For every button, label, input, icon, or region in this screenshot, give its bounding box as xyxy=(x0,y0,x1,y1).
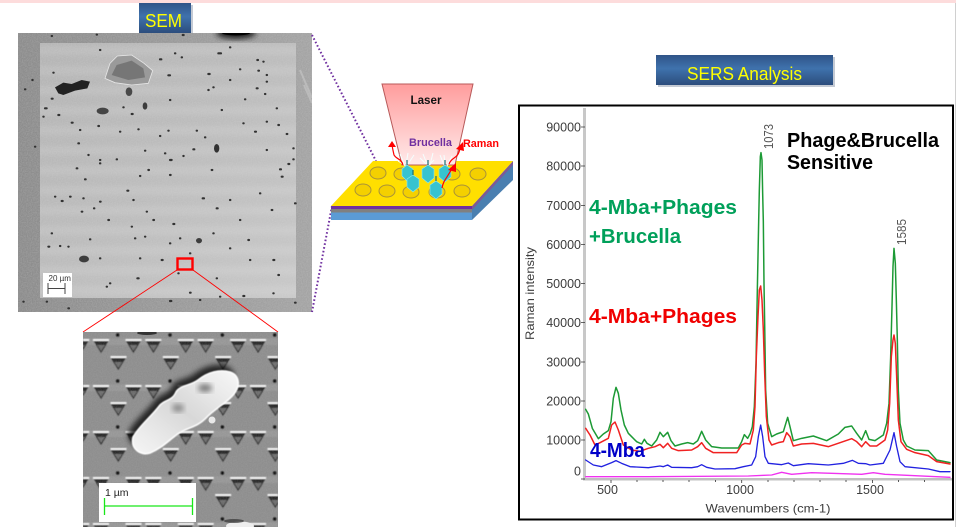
top pink strip xyxy=(0,0,956,3)
x axis tick labels: 1000 xyxy=(726,483,754,497)
SEM scale bar 20 µm xyxy=(43,273,72,297)
SERS substrate diagram xyxy=(331,84,513,220)
y axis tick labels xyxy=(546,120,581,478)
y axis tick labels: 0 xyxy=(574,464,581,478)
surface debris xyxy=(55,55,219,262)
magenta baseline curve xyxy=(586,472,950,477)
y axis tick labels: 40000 xyxy=(546,316,581,330)
red curve: 4-Mba+Phages xyxy=(586,286,950,464)
annotation: Phage&Brucella Sensitive: Phage&Brucella xyxy=(787,130,940,152)
x axis tick labels xyxy=(597,483,884,497)
y axis tick labels: 30000 xyxy=(546,356,581,370)
y axis tick labels: 60000 xyxy=(546,238,581,252)
bacterium xyxy=(128,365,238,454)
annotation: Phage&Brucella Sensitive: Sensitive xyxy=(787,152,873,174)
series label: 4-Mba+Phages+Brucella xyxy=(589,197,737,248)
SERS Analysis heading xyxy=(656,55,835,87)
dotted connector lines xyxy=(312,35,376,312)
SEM scale bar 20 µm: 20 µm xyxy=(48,274,71,283)
SERS Analysis heading: SERS Analysis xyxy=(687,64,802,84)
laser beam xyxy=(382,84,473,165)
peak label 1073: 1073 xyxy=(762,124,776,149)
series label: 4-Mba+Phages: 4-Mba+Phages xyxy=(589,306,737,328)
y axis tick labels: 70000 xyxy=(546,199,581,213)
y axis tick labels: 10000 xyxy=(546,434,581,448)
x axis tick labels: 1500 xyxy=(856,483,884,497)
x axis title: Wavenumbers (cm-1) xyxy=(706,502,830,516)
series label: 4-Mba: 4-Mba xyxy=(590,440,646,462)
phage and bacteria cluster xyxy=(398,153,452,199)
axes xyxy=(581,108,952,483)
red selection box and zoom lines xyxy=(83,258,278,332)
Raman scatter arrows xyxy=(388,141,464,188)
SEM micrograph xyxy=(15,27,312,312)
scale bar 1 µm xyxy=(99,483,196,522)
green curve: 4-Mba+Phages+Brucella xyxy=(586,153,950,463)
blue curve: 4-Mba xyxy=(586,425,950,472)
scale bar 1 µm: 1 µm xyxy=(105,487,129,499)
peak label 1585: 1585 xyxy=(895,219,909,245)
laser beam: Laser xyxy=(410,95,442,107)
y axis tick labels: 50000 xyxy=(546,277,581,291)
annotation: Phage&Brucella Sensitive xyxy=(787,130,940,174)
zoomed SEM image of Brucella xyxy=(83,331,278,527)
Brucella label: Brucella xyxy=(409,137,453,149)
y axis tick labels: 20000 xyxy=(546,394,581,408)
specks on SEM surface xyxy=(15,35,296,308)
series label: 4-Mba+Phages+Brucella: +Brucella xyxy=(589,226,682,248)
substrate plate xyxy=(331,161,513,220)
y axis tick labels: 80000 xyxy=(546,160,581,174)
series label: 4-Mba+Phages+Brucella: 4-Mba+Phages xyxy=(589,197,737,219)
Raman label: Raman xyxy=(463,138,499,150)
SEM heading: SEM xyxy=(145,11,182,31)
SEM heading xyxy=(139,3,193,34)
spectra curves xyxy=(586,153,950,477)
Raman spectra chart xyxy=(519,106,953,520)
x axis tick labels: 500 xyxy=(597,483,618,497)
y axis title: Raman intensity xyxy=(523,247,537,340)
y axis tick labels: 90000 xyxy=(546,120,581,134)
